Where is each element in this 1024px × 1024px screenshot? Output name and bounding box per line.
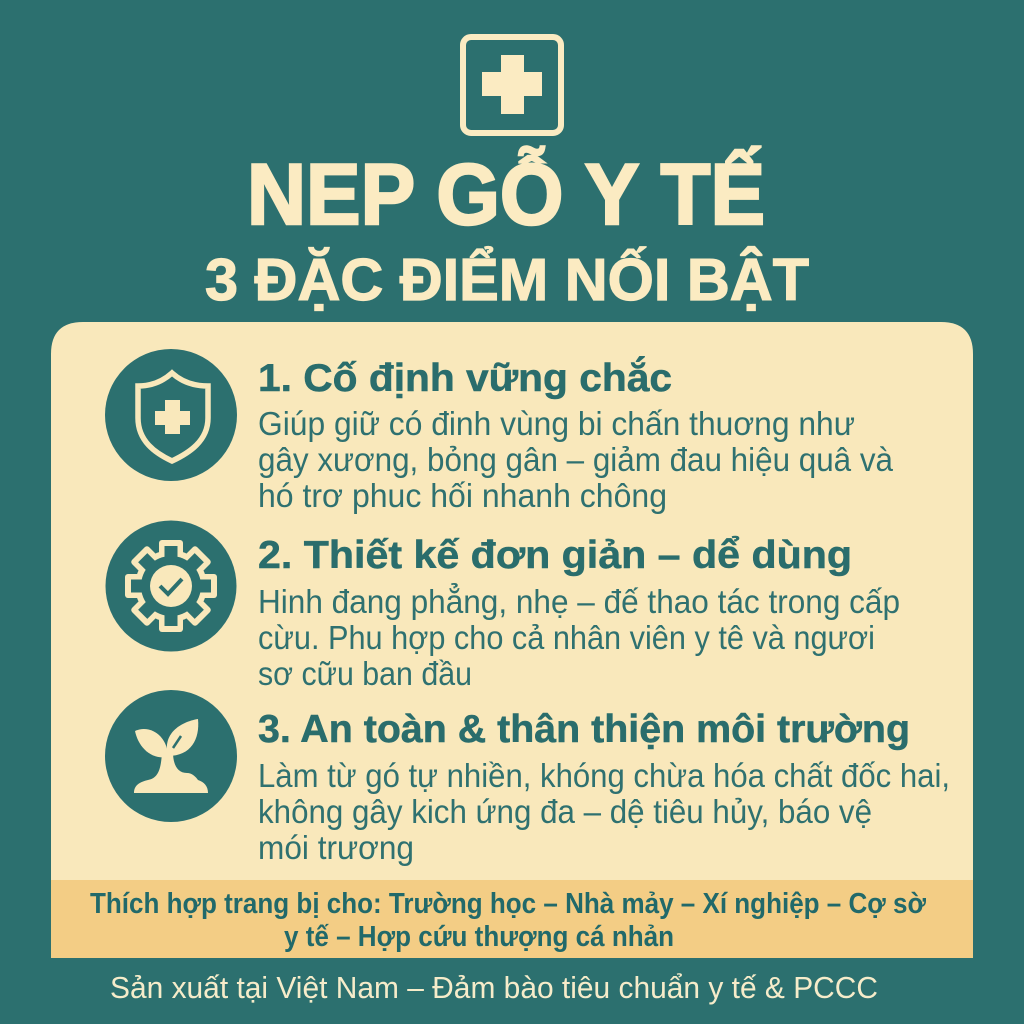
subtitle: 3 ĐẶC ĐIỂM NỐI BẬT xyxy=(205,246,809,313)
text: feature 3 description: Làm từ gó tự nhiền, khóng chừa hóa chất đốc hai, xyxy=(258,757,950,794)
text: feature 2 description: cừu. Phu hợp cho cả nhân viên y tê và ngươi xyxy=(258,619,875,656)
panel: features xyxy=(51,322,973,958)
text: feature 2 description: sơ cữu ban đầu xyxy=(258,655,472,692)
callout: suitable for band: Thích hợp trang bị cho: Trường học – Nhà mảy – Xí nghiệp – Cợ sờ xyxy=(90,888,926,920)
text: feature 1 description: Giúp giữ có đinh vùng bi chấn thuơng như xyxy=(258,405,855,442)
heading: feature 1: 1. Cố định vững chắc xyxy=(258,356,672,400)
text: feature 1 description: gây xương, bỏng gân – giảm đau hiệu quâ và xyxy=(258,441,894,478)
text: feature 3 description: mói trương xyxy=(258,829,414,866)
icon: shield xyxy=(105,349,237,481)
text: feature 3 description: không gây kich ứng đa – dệ tiêu hủy, báo vệ xyxy=(258,793,872,830)
text: feature 3 description xyxy=(258,757,950,866)
heading: feature 3: 3. An toàn & thân thiện môi trường xyxy=(258,708,910,751)
heading: feature 2: 2. Thiết kế đơn giản – dể dùng xyxy=(258,534,852,577)
icon: medical cross in rounded square xyxy=(463,37,561,133)
icon: sprout xyxy=(105,690,237,822)
title: NEP GỖ Y TẾ xyxy=(247,147,765,243)
footer: Sản xuất tại Việt Nam – Đảm bào tiêu chuẩn y tế & PCCC xyxy=(110,970,878,1005)
text: feature 2 description xyxy=(258,583,900,692)
text: feature 1 description: hó trơ phuc hối nhanh chông xyxy=(258,477,667,514)
text: feature 1 description xyxy=(258,405,894,514)
text: feature 2 description: Hinh đang phẳng, nhẹ – đế thao tác trong cấp xyxy=(258,583,900,620)
callout: suitable for band: y tế – Hợp cứu thượng cá nhản xyxy=(284,921,674,953)
icon: gear with check xyxy=(106,520,236,652)
callout: suitable for band xyxy=(51,880,973,958)
